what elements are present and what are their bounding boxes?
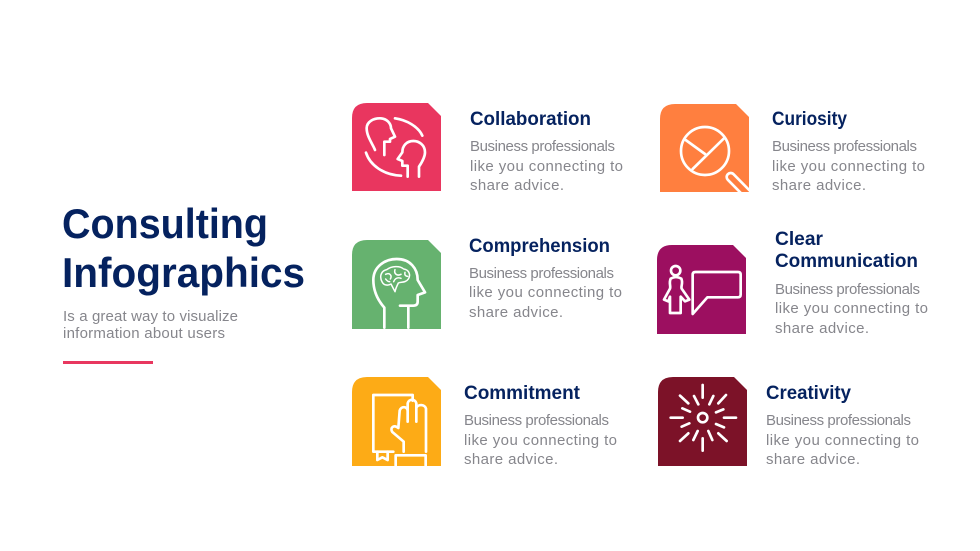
body: collaboration (470, 138, 623, 194)
panel: clear communication (657, 229, 928, 337)
body: commitment: like you connecting to (464, 432, 617, 449)
tile: collaboration (352, 103, 441, 191)
accent line (63, 361, 153, 364)
tile: creativity (658, 377, 747, 466)
body: collaboration: Business professionals (470, 138, 615, 155)
body: clear communication (775, 281, 928, 337)
body: creativity (766, 412, 919, 468)
heading: comprehension: Comprehension (469, 236, 610, 257)
body: curiosity: Business professionals (772, 138, 917, 155)
body: creativity: like you connecting to (766, 432, 919, 449)
heading: clear communication: Communication (775, 251, 918, 272)
heading: curiosity: Curiosity (772, 109, 847, 130)
body: collaboration: like you connecting to (470, 158, 623, 175)
tile: curiosity (660, 104, 749, 192)
body: commitment: share advice. (464, 451, 558, 468)
panel: comprehension (352, 236, 622, 329)
heading: creativity: Creativity (766, 383, 851, 404)
icon: hand on book (373, 395, 426, 467)
heading: clear communication (775, 229, 918, 272)
body: comprehension (469, 265, 622, 321)
body: clear communication: Business professionals (775, 281, 920, 298)
icon: person with speech bubble (664, 266, 741, 314)
body: creativity: Business professionals (766, 412, 911, 429)
heading: collaboration: Collaboration (470, 109, 591, 130)
body: comprehension: Business professionals (469, 265, 614, 282)
panel: curiosity (660, 104, 924, 192)
body: curiosity: share advice. (772, 177, 866, 194)
panel: commitment (352, 377, 617, 468)
body: comprehension: like you connecting to (469, 284, 622, 301)
panel: creativity (658, 377, 919, 468)
body: collaboration: share advice. (470, 177, 564, 194)
tile: clear communication (657, 245, 746, 334)
subtitle (63, 308, 238, 342)
body: curiosity: like you connecting to (772, 158, 925, 175)
subtitle: Is a great way to visualize (63, 308, 238, 325)
title: Infographics (62, 249, 305, 296)
body: clear communication: like you connecting to (775, 300, 928, 317)
icon: two heads (366, 118, 425, 177)
body: comprehension: share advice. (469, 304, 563, 321)
body: creativity: share advice. (766, 451, 860, 468)
subtitle: information about users (63, 325, 225, 342)
body: commitment: Business professionals (464, 412, 609, 429)
heading: clear communication: Clear (775, 229, 824, 250)
body: clear communication: share advice. (775, 320, 869, 337)
body: curiosity (772, 138, 925, 194)
tile: comprehension (352, 240, 441, 329)
tile: commitment (352, 377, 441, 466)
title (62, 200, 305, 296)
body: commitment (464, 412, 617, 468)
heading: commitment: Commitment (464, 383, 581, 404)
icon: sparkle burst (671, 385, 736, 451)
title: Consulting (62, 200, 268, 247)
icon: head with brain (373, 259, 425, 328)
panel: collaboration (352, 103, 623, 194)
icon: magnifying glass (680, 126, 749, 192)
